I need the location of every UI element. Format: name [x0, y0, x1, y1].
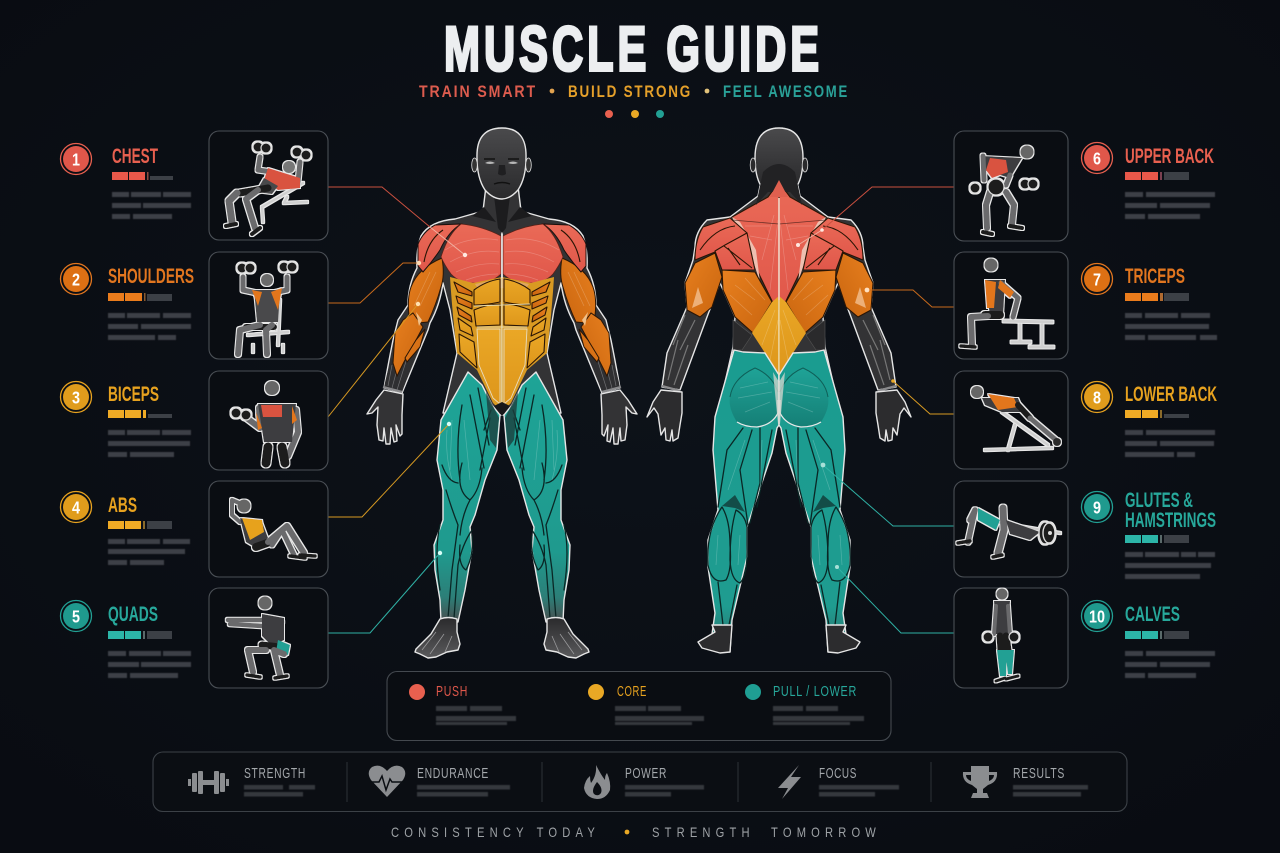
card: squat	[209, 588, 328, 688]
card: bent over row	[954, 131, 1068, 241]
card: hip thrust	[954, 481, 1068, 577]
card: bench dip	[954, 252, 1068, 359]
figure: bench press	[226, 142, 311, 234]
icon: heart with pulse	[369, 766, 405, 797]
legend: core	[588, 683, 704, 725]
rating bar	[1125, 631, 1189, 639]
rating bar	[1125, 410, 1189, 418]
description placeholder	[1125, 192, 1215, 219]
number badge 10: 10	[1089, 607, 1105, 627]
panel: chest	[60, 144, 191, 219]
heading: GLUTES &	[1125, 489, 1193, 512]
head	[750, 128, 808, 205]
benefits panel	[153, 752, 1127, 812]
legend panel	[387, 672, 891, 740]
card: chest press	[209, 131, 328, 240]
heel	[698, 625, 732, 653]
lower back	[752, 296, 779, 375]
quad and calf	[434, 372, 500, 622]
legend: pull and lower	[745, 683, 864, 725]
hand	[647, 390, 682, 441]
connector: quads	[328, 551, 442, 633]
forearm	[668, 315, 695, 385]
icon: dumbbell	[188, 771, 229, 794]
benefit: focus	[778, 765, 899, 799]
gastrocnemius	[708, 507, 730, 581]
front figure left half	[367, 186, 502, 658]
panel: abs	[60, 492, 190, 565]
front figure mirrored half	[502, 186, 637, 658]
lats	[722, 270, 772, 333]
figure: calf raise	[983, 588, 1019, 681]
card: crunch	[209, 481, 328, 577]
pectoral	[441, 224, 501, 283]
icon: flame	[584, 765, 610, 799]
footer tagline: CONSISTENCY TODAY	[391, 824, 600, 840]
back figure left half	[647, 182, 779, 653]
abs	[450, 277, 502, 412]
infraspinatus	[715, 233, 755, 270]
heading: LOWER BACK	[1125, 383, 1217, 406]
panel: glutes and hamstrings	[1082, 489, 1216, 579]
benefit: endurance: ENDURANCE	[417, 765, 489, 782]
card: back extension	[954, 371, 1068, 469]
connector: abs	[328, 422, 451, 517]
card: shoulder press	[209, 252, 328, 359]
decorative colour dots	[605, 110, 664, 118]
wrist band	[383, 387, 402, 392]
heading: UPPER BACK	[1125, 145, 1214, 168]
heading: ABS	[108, 494, 137, 517]
back body figure	[647, 128, 911, 653]
foot	[415, 618, 460, 658]
heading: QUADS	[108, 603, 158, 626]
neck centre	[494, 196, 510, 233]
centre lines	[501, 234, 503, 278]
panel: lower back	[1082, 382, 1217, 457]
silhouette	[384, 186, 502, 415]
connector: chest	[328, 187, 467, 257]
icon: lightning bolt	[778, 765, 801, 799]
figure: seated press	[237, 262, 297, 354]
subtitle: TRAIN SMART	[419, 83, 537, 101]
legend: push	[409, 683, 516, 725]
connector: glutes and hamstrings	[821, 463, 954, 526]
back figure mirrored half	[779, 182, 911, 653]
description placeholder	[108, 430, 191, 457]
panel: quads	[60, 600, 191, 678]
leg and glute	[708, 350, 779, 652]
description placeholder	[1125, 651, 1215, 678]
number badge 8: 8	[1093, 388, 1101, 408]
number badge 4: 4	[72, 498, 80, 518]
figure: row	[970, 146, 1038, 234]
number badge 3: 3	[72, 388, 80, 408]
hamstring lines	[718, 428, 772, 525]
rating bar	[1125, 535, 1189, 543]
connector: shoulders	[328, 261, 421, 303]
heading: CALVES	[1125, 603, 1180, 626]
figure: hip thrust	[958, 508, 1060, 557]
description placeholder	[108, 651, 191, 678]
description placeholder	[108, 313, 191, 340]
spine	[778, 198, 780, 300]
gluteus	[730, 368, 778, 427]
footer tagline: STRENGTH TOMORROW	[652, 824, 881, 840]
upper back	[732, 182, 779, 310]
forearm dark	[384, 330, 425, 392]
neck detail	[472, 207, 496, 222]
dividers	[347, 762, 931, 802]
triceps	[685, 253, 722, 317]
front body figure	[367, 128, 637, 658]
subtitle: FEEL AWESOME	[723, 83, 849, 101]
hand	[367, 390, 403, 444]
legend: core: CORE	[617, 683, 647, 700]
description placeholder	[1125, 313, 1217, 340]
benefit: power: POWER	[625, 765, 667, 782]
connector: biceps	[328, 302, 420, 417]
connector: calves	[835, 565, 954, 633]
silhouette	[662, 186, 779, 415]
number badge 5: 5	[72, 607, 80, 627]
panel: biceps	[60, 382, 191, 457]
panel: glutes and hamstrings: HAMSTRINGS	[1125, 509, 1216, 532]
number badge 6: 6	[1093, 149, 1101, 169]
description placeholder	[112, 192, 191, 219]
description placeholder	[1125, 552, 1215, 579]
benefit: results: RESULTS	[1013, 765, 1065, 782]
connector: upper back	[796, 187, 954, 247]
heading: SHOULDERS	[108, 265, 194, 288]
rating bar	[112, 172, 173, 180]
panel: triceps	[1082, 264, 1217, 340]
rating bar	[1125, 293, 1189, 301]
legend: pull and lower: PULL / LOWER	[773, 683, 857, 700]
rating bar	[108, 293, 172, 301]
benefit: focus: FOCUS	[819, 765, 857, 782]
deltoid	[418, 224, 461, 272]
figure: squat	[228, 596, 290, 678]
benefit: power	[584, 765, 704, 799]
description placeholder	[1125, 430, 1215, 457]
heading: TRICEPS	[1125, 265, 1185, 288]
benefit: strength: STRENGTH	[244, 765, 306, 782]
rating bar	[1125, 172, 1189, 180]
benefit: strength	[188, 765, 315, 796]
subtitle	[419, 83, 849, 101]
panel: shoulders	[60, 264, 194, 340]
description placeholder	[108, 539, 190, 565]
panel: calves	[1082, 600, 1215, 678]
number badge 7: 7	[1093, 270, 1101, 290]
connector: lower back	[891, 379, 954, 414]
number badge 9: 9	[1093, 498, 1101, 518]
rating bar	[108, 521, 172, 529]
connector: triceps	[865, 288, 954, 307]
forearm muscle	[393, 313, 423, 376]
title: MUSCLE GUIDE	[444, 13, 823, 85]
figure: curl	[231, 381, 298, 463]
legend: push: PUSH	[436, 683, 468, 700]
benefit: endurance	[369, 765, 510, 797]
panel: upper back	[1082, 142, 1215, 219]
benefit: results	[963, 765, 1088, 798]
number badge 1: 1	[72, 150, 80, 170]
card: biceps curl	[209, 371, 328, 470]
rating bar	[108, 410, 172, 418]
footer tagline	[391, 824, 881, 840]
figure: hyperextension	[971, 386, 1061, 450]
figure: dip	[961, 258, 1053, 347]
subtitle: BUILD STRONG	[568, 83, 692, 101]
head	[472, 128, 531, 199]
heading: BICEPS	[108, 383, 159, 406]
icon: trophy	[963, 766, 997, 798]
rating bar	[108, 631, 172, 639]
wrist band	[662, 386, 680, 391]
figure: sit up	[232, 500, 315, 558]
upper arm	[408, 258, 443, 323]
number badge 2: 2	[72, 270, 80, 290]
hip side	[733, 320, 752, 350]
heading: CHEST	[112, 145, 158, 168]
rear deltoid	[695, 218, 747, 260]
card: calf raise	[954, 588, 1068, 688]
